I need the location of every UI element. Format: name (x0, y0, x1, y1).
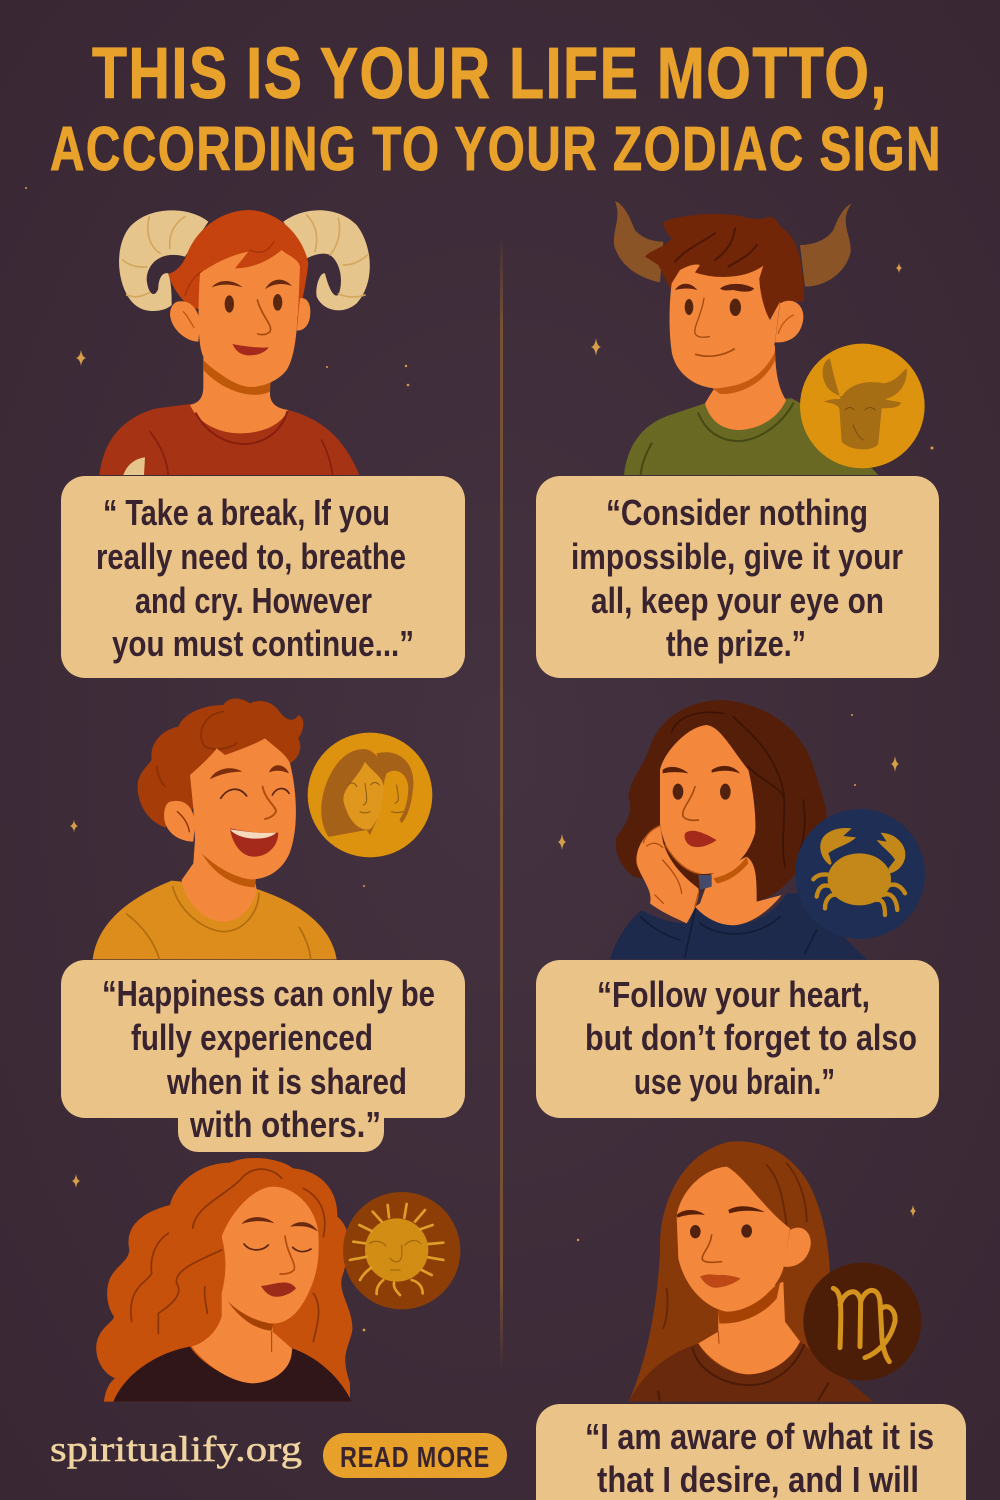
quote bubble: Aries: really need to, breathe (96, 536, 406, 577)
quote bubble: Aries: “ Take a break, If you (103, 492, 390, 533)
shirt (113, 1347, 352, 1402)
title (50, 34, 942, 184)
quote bubble: Virgo (536, 1404, 966, 1500)
hair (168, 210, 308, 317)
panel: Aries (99, 210, 370, 475)
quote bubble: Taurus: all, keep your eye on (591, 580, 884, 621)
icon: twins medallion (308, 733, 432, 857)
quote bubble: Cancer: use you brain.” (634, 1061, 835, 1102)
ear (164, 801, 195, 842)
face (670, 265, 780, 388)
panel: Gemini (93, 699, 432, 959)
quote bubble: Gemini (61, 960, 465, 1152)
neck (190, 357, 288, 433)
icon: sun medallion (343, 1192, 460, 1309)
read more button (323, 1433, 507, 1478)
ear (775, 301, 803, 342)
shirt (99, 404, 359, 475)
quote bubble: Virgo: that I desire, and I will (597, 1459, 919, 1500)
quote bubble: Aries: you must continue...” (112, 623, 414, 664)
shirt (610, 893, 867, 959)
quote bubble: Gemini: when it is shared (166, 1061, 407, 1102)
shirt (629, 1342, 873, 1402)
neck (695, 857, 782, 925)
neck (192, 1293, 292, 1383)
panel: Taurus (614, 201, 925, 475)
quote bubble: Cancer: but don’t forget to also (585, 1017, 917, 1058)
hand (636, 825, 699, 923)
panel: Virgo (629, 1141, 921, 1402)
face (199, 250, 300, 387)
neck (698, 1280, 800, 1374)
panel: Leo (96, 1158, 460, 1402)
quote bubble: Taurus: “Consider nothing (606, 492, 868, 533)
icon: virgo medallion (803, 1263, 921, 1381)
icon: bull medallion (800, 344, 925, 468)
hair (96, 1158, 352, 1402)
quote bubble: Taurus: impossible, give it your (571, 536, 903, 577)
icon: bull horns (614, 201, 852, 287)
footer site name: spiritualify.org (50, 1429, 302, 1469)
icon: crab medallion (795, 809, 925, 939)
panel: Cancer (610, 700, 925, 959)
quote bubble: Virgo: “I am aware of what it is (585, 1416, 934, 1457)
quote bubble: Aries: and cry. However (135, 580, 372, 621)
quote bubble: Cancer (536, 960, 939, 1118)
shirt (624, 398, 878, 475)
hair (645, 214, 804, 320)
face (222, 1187, 319, 1324)
quote bubble: Gemini: “Happiness can only be (102, 973, 435, 1014)
center divider (500, 235, 503, 1370)
ear (170, 301, 200, 342)
sparkles and dust (25, 187, 934, 1331)
neck (182, 840, 257, 922)
hair (629, 1141, 830, 1400)
hair (138, 699, 303, 827)
read more button: READ MORE (340, 1442, 490, 1474)
quote bubble: Taurus (536, 476, 939, 678)
quote bubble: Gemini: with others.” (189, 1104, 381, 1145)
neck (705, 345, 786, 430)
face (660, 725, 755, 874)
ear (783, 1228, 811, 1267)
quote bubble: Gemini: fully experienced (131, 1017, 373, 1058)
shirt (93, 881, 337, 959)
icon: ram horns (119, 210, 370, 311)
quote bubble: Taurus: the prize.” (666, 623, 806, 664)
quote bubble: Cancer: “Follow your heart, (597, 974, 870, 1015)
quote bubble: Aries (61, 476, 465, 678)
face (190, 738, 296, 879)
face (677, 1167, 790, 1312)
hair (616, 700, 827, 902)
